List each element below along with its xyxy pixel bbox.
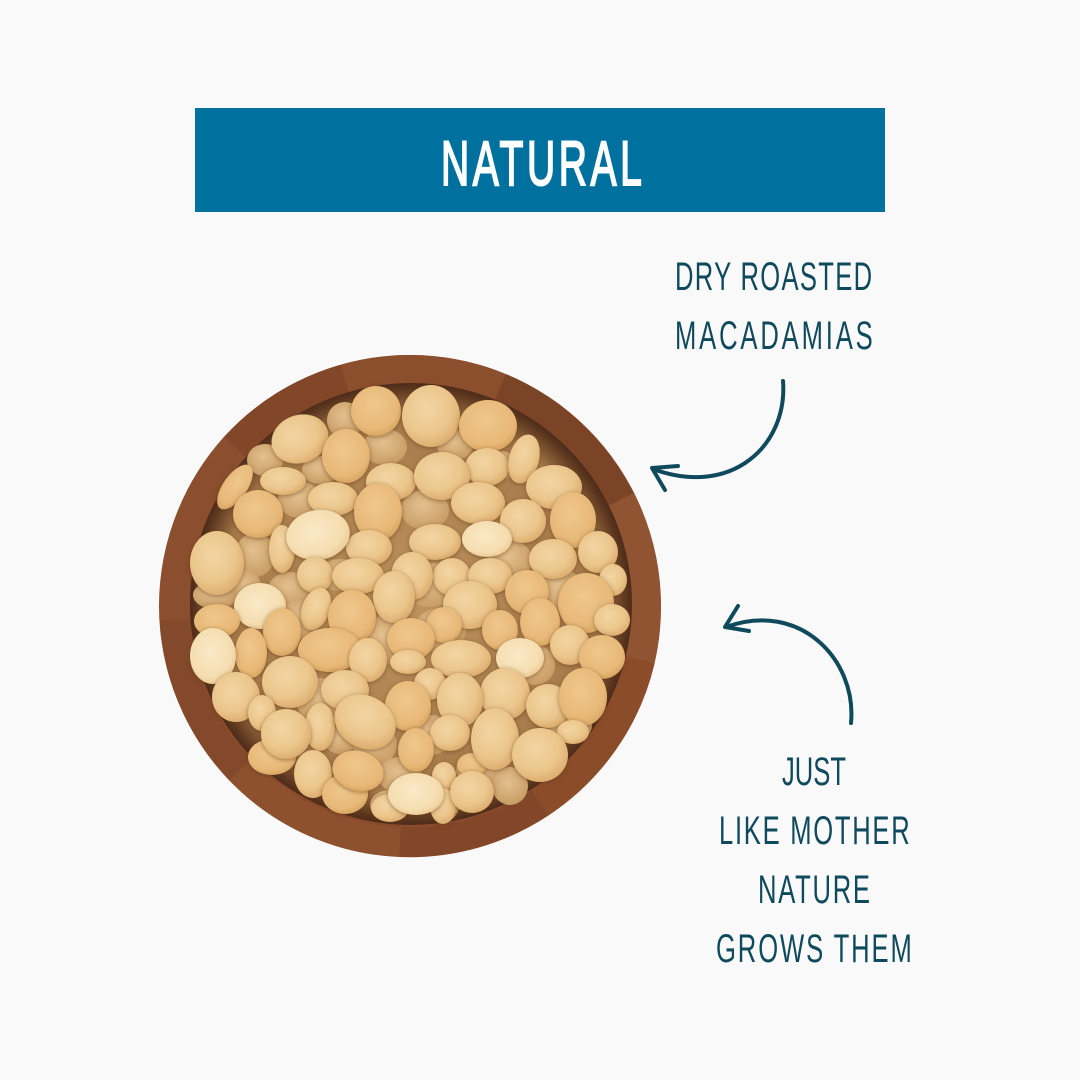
macadamia nuts: back layer: [193, 402, 592, 822]
macadamia nuts: front layer: [190, 385, 630, 824]
callout: just like mother nature grows them: LIKE MOTHER: [719, 809, 910, 854]
callout: dry roasted macadamias: [675, 255, 873, 359]
arrow: to bowl from bottom callout: [725, 606, 851, 723]
banner title: NATURAL: [441, 130, 642, 199]
callout: dry roasted macadamias: MACADAMIAS: [675, 314, 873, 359]
callout: just like mother nature grows them: [716, 750, 912, 972]
callout: just like mother nature grows them: NATURE: [758, 868, 870, 913]
arrow: to bowl from top callout: [652, 381, 783, 490]
wooden bowl: [159, 355, 661, 857]
callout: dry roasted macadamias: DRY ROASTED: [675, 255, 872, 300]
callout: just like mother nature grows them: GROWS THEM: [716, 927, 912, 972]
callout: just like mother nature grows them: JUST: [782, 750, 846, 795]
banner: natural: [195, 108, 885, 212]
